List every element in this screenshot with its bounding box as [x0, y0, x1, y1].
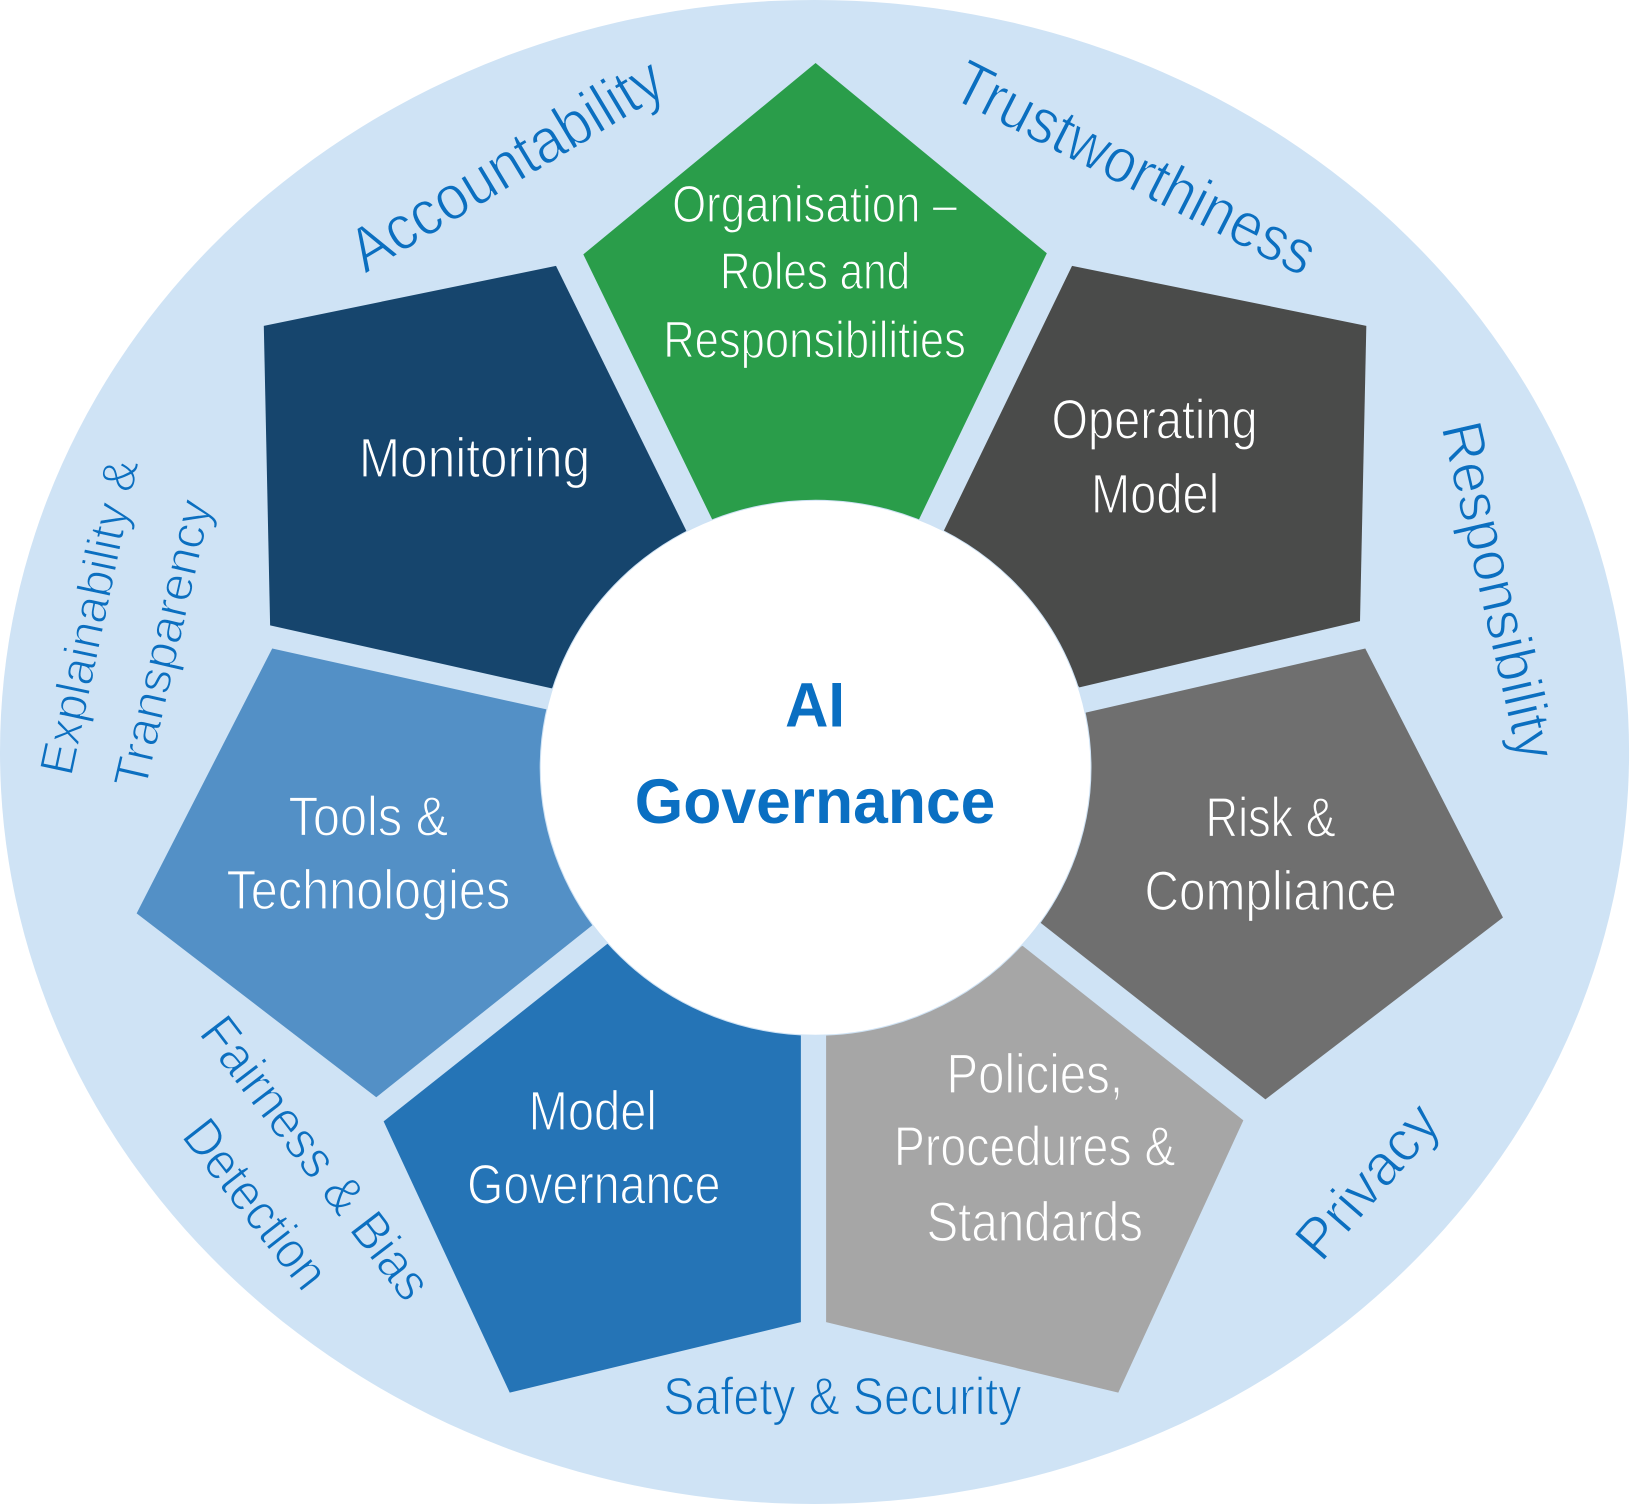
label: Fairness & Bias Detection: Detection [171, 1107, 340, 1301]
panel: Operating Model: Model [1091, 463, 1219, 525]
panel: Tools & Technologies [137, 648, 593, 1097]
panel: Model Governance: Model [529, 1080, 657, 1142]
label: Explainability & Transparency: Explainability & [30, 454, 149, 780]
centre circle: AI Governance: Governance [635, 767, 995, 837]
panel: Organisation – Roles and Responsibilities: Responsibilities [663, 310, 966, 368]
label: Safety & Security: Safety & Security [663, 1368, 1022, 1427]
panel: Model Governance [384, 944, 801, 1393]
panel: Policies, Procedures & Standards: Standards [926, 1191, 1143, 1253]
panel: Operating Model [944, 266, 1366, 687]
centre circle: AI Governance: AI [785, 670, 845, 740]
panel: Organisation – Roles and Responsibilities [583, 63, 1047, 520]
label: Explainability & Transparency [30, 454, 223, 793]
label: Fairness & Bias Detection: Fairness & Bias [188, 1005, 443, 1312]
panel: Organisation – Roles and Responsibilities: Roles and [720, 242, 910, 300]
panel: Policies, Procedures & Standards [826, 946, 1243, 1393]
panel: Model Governance: Governance [467, 1153, 720, 1215]
label: Trustworthiness: Trustworthiness [942, 47, 1328, 290]
panel: Policies, Procedures & Standards: Policies, [946, 1043, 1123, 1105]
panel: Risk & Compliance: Compliance [1145, 860, 1397, 922]
panel: Policies, Procedures & Standards: Procedures & [894, 1116, 1176, 1178]
label: Privacy: Privacy [1283, 1091, 1453, 1272]
panel: Organisation – Roles and Responsibilities: Organisation – [672, 175, 957, 233]
label: Responsibility: Responsibility [1428, 415, 1568, 766]
panel: Operating Model: Operating [1052, 388, 1258, 450]
centre circle: AI Governance [540, 500, 1091, 1035]
panel: Monitoring: Monitoring [359, 427, 590, 489]
panel: Risk & Compliance: Risk & [1206, 787, 1336, 849]
label: Accountability: Accountability [336, 43, 676, 286]
panel: Tools & Technologies: Tools & [289, 786, 448, 848]
panel: Risk & Compliance [1041, 648, 1503, 1099]
panel: Tools & Technologies: Technologies [226, 859, 510, 921]
label: Explainability & Transparency: Transparency [104, 494, 223, 793]
panel: Monitoring [264, 266, 686, 688]
